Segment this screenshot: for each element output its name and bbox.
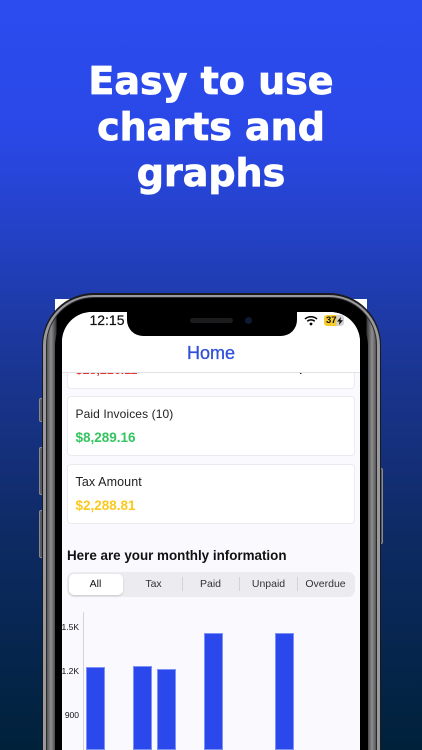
side button left mute xyxy=(39,398,43,422)
overdue note: $55.15 paid so far xyxy=(266,364,350,375)
card: overdue, partially hidden xyxy=(67,351,355,389)
y label 1.2K: 1.2K xyxy=(62,666,79,676)
card: paid invoices xyxy=(67,396,355,456)
bar chart xyxy=(83,612,294,750)
bar 1 xyxy=(86,667,104,750)
black bezel xyxy=(55,304,368,750)
icon: wifi xyxy=(304,316,318,326)
title: charts and xyxy=(97,105,325,149)
y axis xyxy=(83,612,84,750)
tab overdue: Overdue xyxy=(305,578,346,590)
tab paid: Paid xyxy=(200,578,221,590)
bar 5 xyxy=(274,633,294,750)
title: Easy to use xyxy=(88,59,334,103)
white screenshot corners behind phone xyxy=(55,299,367,329)
label: Paid Invoices (10) xyxy=(76,407,173,421)
bar 4 xyxy=(204,633,222,750)
y label 900: 900 xyxy=(65,710,79,720)
phone screen xyxy=(62,312,360,750)
label: Tax Amount xyxy=(76,475,142,489)
battery xyxy=(324,315,344,326)
value: $2,288.81 xyxy=(76,498,136,513)
outer metal band xyxy=(43,295,380,750)
phone frame xyxy=(42,293,381,750)
battery level: 37 xyxy=(326,315,337,326)
bar 2 xyxy=(133,666,152,750)
tab unpaid: Unpaid xyxy=(252,578,285,590)
speaker xyxy=(190,318,233,323)
camera xyxy=(245,317,252,324)
bar 3 xyxy=(156,669,176,750)
title xyxy=(88,59,334,195)
icon: charging bolt xyxy=(337,317,343,325)
side button right power xyxy=(379,468,383,544)
title: graphs xyxy=(137,151,285,195)
navigation bar xyxy=(62,312,360,373)
selected tab xyxy=(69,574,123,595)
segmented control xyxy=(67,572,355,597)
dark groove xyxy=(46,297,377,750)
status time: 12:15 xyxy=(89,312,125,328)
value: $8,289.16 xyxy=(76,430,136,445)
side button left volume down xyxy=(39,510,43,558)
nav title: Home xyxy=(187,343,235,363)
tab tax: Tax xyxy=(145,578,162,590)
overdue amount: $23,216.11 xyxy=(76,363,137,377)
card: tax amount xyxy=(67,464,355,524)
side button left volume up xyxy=(39,447,43,495)
section heading: Here are your monthly information xyxy=(67,548,286,563)
notch xyxy=(127,305,297,336)
y label 1.5K: 1.5K xyxy=(62,622,79,632)
tab all: All xyxy=(90,578,101,590)
inner bezel gradient xyxy=(47,298,376,750)
